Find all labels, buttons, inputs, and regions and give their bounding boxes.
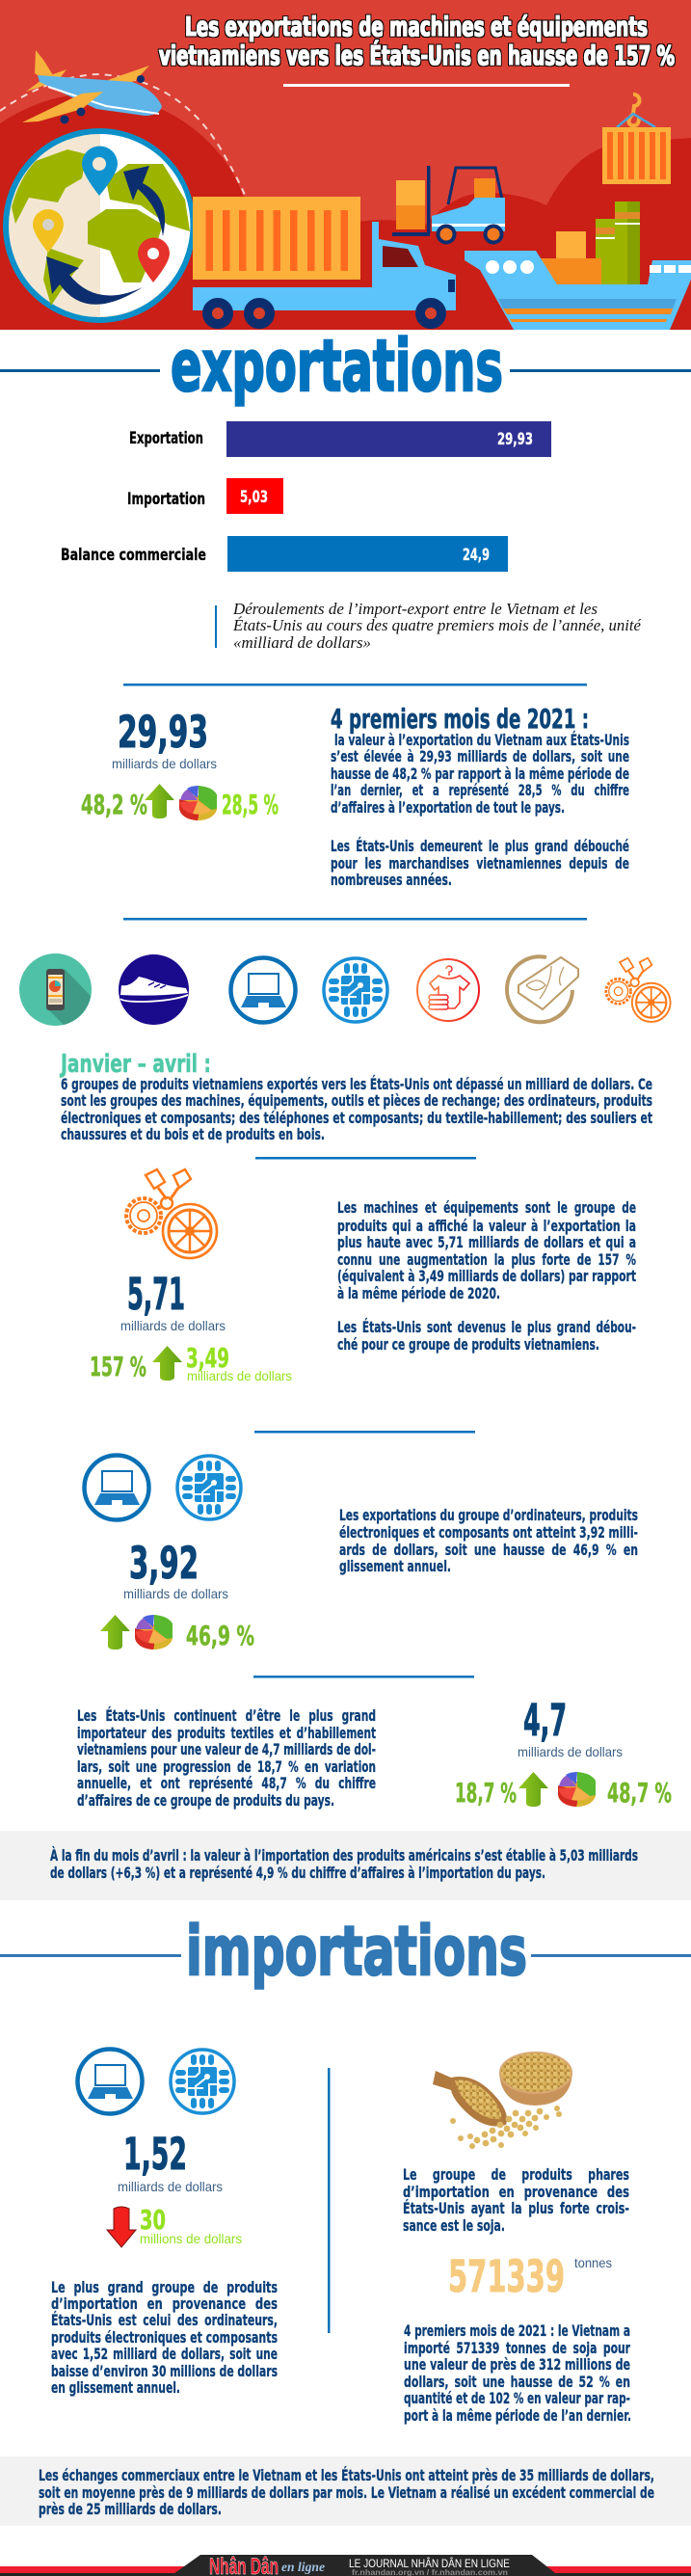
panel: textile stat (455, 1695, 672, 1809)
text block: soybeans detail (404, 2321, 631, 2425)
footer: en ligne (281, 2561, 325, 2575)
pin: blue (82, 147, 118, 196)
chart note: États-Unis au cours des quatre premiers mois de l’année, unité (232, 616, 642, 634)
text block: textile: lars, soit une progression de 18,7 % en variation (77, 1758, 376, 1776)
text block: import computers: avec 1,52 milliard de dollars, soit une (51, 2345, 278, 2363)
text block: textile: d’affaires de ce groupe de produits du pays. (77, 1791, 334, 1810)
icon: laptop (85, 1456, 148, 1519)
panel: textile stat: 18,7 % (455, 1777, 517, 1809)
chart note (215, 600, 642, 652)
panel: machines stat (90, 1169, 292, 1383)
panel: import computers stat: millions de dollars (140, 2231, 242, 2246)
text block: 4 premiers mois: d’affaires à l’exportation de tout le pays. (331, 798, 565, 817)
bar: balance commerciale: 24,9 (463, 546, 490, 564)
icon: shoe (119, 954, 189, 1025)
bar: importation (127, 478, 283, 514)
stat: total exports: 48,2 % (81, 789, 147, 820)
icon: down arrow (107, 2207, 136, 2247)
chart note: «milliard de dollars» (233, 633, 371, 652)
panel: machines stat: 5,71 (127, 1269, 185, 1320)
icon: truck (193, 197, 456, 324)
panel: machines stat: 157 % (90, 1351, 146, 1382)
chart note: Déroulements de l’import-export entre le Vietnam et les (232, 600, 598, 618)
panel: machines stat: 3,49 (186, 1342, 229, 1374)
heading: exportations: exportations (171, 325, 503, 408)
panel: computers stat: 46,9 % (186, 1620, 254, 1651)
panel: machines stat: milliards de dollars (187, 1368, 292, 1383)
panel: computers stat: 3,92 (129, 1538, 199, 1589)
text block: machines (337, 1198, 636, 1354)
text block: import computers: d’importation en provenance des (51, 2294, 278, 2313)
icon: up arrow (145, 784, 174, 818)
icon: up arrow (152, 1346, 182, 1381)
text block: import computers (51, 2278, 278, 2397)
panel: import computers stat: milliards de dollars (118, 2179, 223, 2194)
icon: machinery large (126, 1169, 217, 1258)
text block: machines: à la même période de 2020. (337, 1284, 500, 1302)
stat: total exports (81, 707, 279, 820)
icon: pie (558, 1772, 596, 1807)
callout: conclusion (0, 2456, 691, 2526)
icon: wood (507, 956, 578, 1022)
background hills (0, 94, 691, 330)
panel: machines stat: milliards de dollars (120, 1318, 226, 1333)
icon: up arrow (100, 1615, 130, 1650)
pin: red (138, 237, 170, 282)
icon: globe with pins (6, 131, 193, 320)
icon: pie (135, 1615, 173, 1650)
text block: import computers: en glissement annuel. (51, 2378, 180, 2397)
text block: janvier-avril: Janvier – avril : (60, 1050, 211, 1079)
text block: soybeans intro (403, 2165, 629, 2235)
text block: import computers: Le plus grand groupe de produits (51, 2278, 278, 2296)
panel: computers stat: milliards de dollars (123, 1586, 228, 1601)
bar: importation: Importation (127, 490, 205, 508)
header illustration (0, 0, 691, 330)
icon: textile (417, 959, 479, 1021)
footer: LE JOURNAL NHÂN DÂN EN LIGNE (349, 2556, 510, 2570)
icon: hanging container (602, 94, 671, 184)
text block: 4 premiers mois (331, 703, 629, 889)
text block: janvier-avril: chaussures et du bois et de produits en bois. (61, 1125, 325, 1143)
icon: forklift (392, 166, 505, 243)
text block: textile: Les États-Unis continuent d’être le plus grand (77, 1706, 376, 1725)
icon: chip (171, 2050, 234, 2113)
text block: textile (77, 1706, 376, 1810)
panel: textile stat: 4,7 (523, 1695, 567, 1746)
pin: yellow (33, 209, 64, 253)
callout: april imports (0, 1831, 691, 1900)
text block: soybeans intro: sance est le soja. (403, 2216, 505, 2235)
stat: total exports: 29,93 (118, 707, 208, 758)
text block: textile: annuelle, et ont représenté 48,7 % du chiffre (77, 1774, 376, 1792)
panel: computers stat (85, 1456, 254, 1651)
icon: phone (19, 953, 92, 1026)
panel: import computers stat (77, 2050, 242, 2247)
bar: exportation: Exportation (129, 429, 203, 447)
image: soybeans (433, 2053, 572, 2149)
icon: chip (324, 958, 387, 1022)
stat: total exports: 28,5 % (222, 789, 279, 820)
heading: importations: importations (186, 1912, 527, 1991)
text block: import computers: baisse d’environ 30 millions de dollars (51, 2362, 278, 2380)
bar: exportation: 29,93 (497, 430, 533, 448)
icon: laptop (77, 2050, 143, 2113)
bar chart: trade balance (61, 421, 551, 572)
icon: laptop (231, 958, 295, 1022)
callout: conclusion: près de 25 milliards de dollars. (39, 2500, 222, 2518)
text block: computers (339, 1506, 638, 1575)
text block: import computers: produits électroniques et composants (51, 2328, 278, 2347)
text block: import computers: États-Unis est celui des ordinateurs, (51, 2311, 278, 2329)
icon row: product groups (19, 953, 671, 1026)
icon: pie (179, 786, 217, 820)
arrows on globe (46, 166, 165, 305)
title (159, 11, 675, 71)
stat: total exports: milliards de dollars (112, 756, 217, 771)
icon: machinery (606, 958, 671, 1022)
panel: import computers stat: 30 (140, 2204, 166, 2236)
panel: textile stat: milliards de dollars (518, 1744, 623, 1759)
stat: soybean tonnes: 571339 (448, 2251, 565, 2302)
bar: balance commerciale (61, 536, 508, 572)
text block: textile: vietnamiens pour une valeur de 4,7 milliards de dol- (77, 1740, 376, 1758)
bar: importation: 5,03 (240, 488, 268, 506)
icon: airplane (22, 50, 162, 123)
bar: exportation (129, 421, 551, 457)
text block: textile: importateur des produits textiles et d’habillement (77, 1724, 376, 1742)
text block: 4 premiers mois: nombreuses années. (331, 871, 452, 889)
bar: balance commerciale: Balance commerciale (61, 546, 206, 564)
icon: up arrow (518, 1772, 548, 1807)
footer (0, 2554, 691, 2576)
panel: import computers stat: 1,52 (123, 2129, 187, 2180)
stat: soybean tonnes: tonnes (574, 2255, 612, 2270)
icon: chip (177, 1456, 241, 1519)
text block: computers: glissement annuel. (339, 1557, 451, 1575)
text block: janvier-avril (60, 1050, 652, 1143)
icon: cargo ship (465, 201, 691, 330)
